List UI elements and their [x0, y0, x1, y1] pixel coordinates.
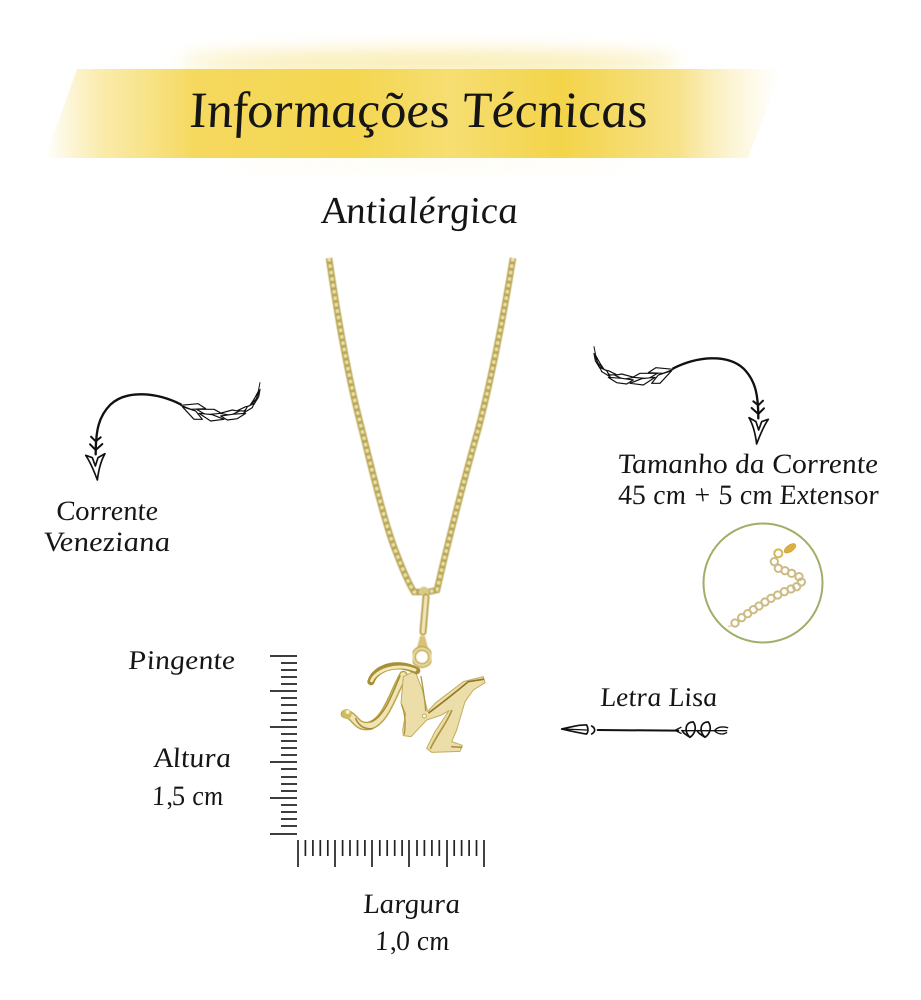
necklace chain [329, 258, 513, 592]
label: pingente: Pingente [125, 645, 237, 675]
label: corrente veneziana: Veneziana [42, 527, 172, 558]
label: tamanho da corrente [616, 449, 882, 511]
highlights [429, 679, 483, 713]
ball end [342, 709, 352, 719]
first stroke [345, 675, 403, 726]
header banner [45, 50, 782, 168]
arrow shaft [673, 358, 758, 418]
arrow: letra lisa [562, 722, 728, 737]
label: tamanho da corrente: 45 cm + 5 cm Extensor [616, 480, 882, 511]
pendant bail [414, 586, 430, 666]
label: largura: 1,0 cm [373, 926, 451, 957]
arrow wheat tail [594, 347, 673, 385]
top swash [371, 666, 417, 682]
arrow: left wheat arrow [86, 383, 260, 480]
title: Informações Técnicas [184, 82, 650, 139]
arrow head [752, 401, 764, 414]
label: altura: Altura [150, 743, 233, 774]
label: largura [360, 889, 462, 957]
arrow: right wheat arrow [594, 347, 768, 444]
label: corrente veneziana: Corrente [54, 496, 160, 527]
label: letra lisa: Letra Lisa [597, 682, 719, 712]
label: largura: Largura [360, 889, 462, 920]
vertical ruler [270, 656, 297, 834]
label: corrente veneziana [42, 496, 172, 558]
horizontal ruler [298, 840, 484, 867]
label: tamanho da corrente: Tamanho da Corrente [616, 449, 880, 480]
subtitle: antialérgica: Antialérgica [316, 190, 520, 232]
label: altura: 1,5 cm [150, 781, 225, 812]
pendant: letter M [342, 666, 485, 752]
body [401, 671, 485, 752]
extender chain links [728, 542, 805, 627]
extender chain photo circle [704, 524, 822, 642]
label: altura [150, 743, 233, 812]
